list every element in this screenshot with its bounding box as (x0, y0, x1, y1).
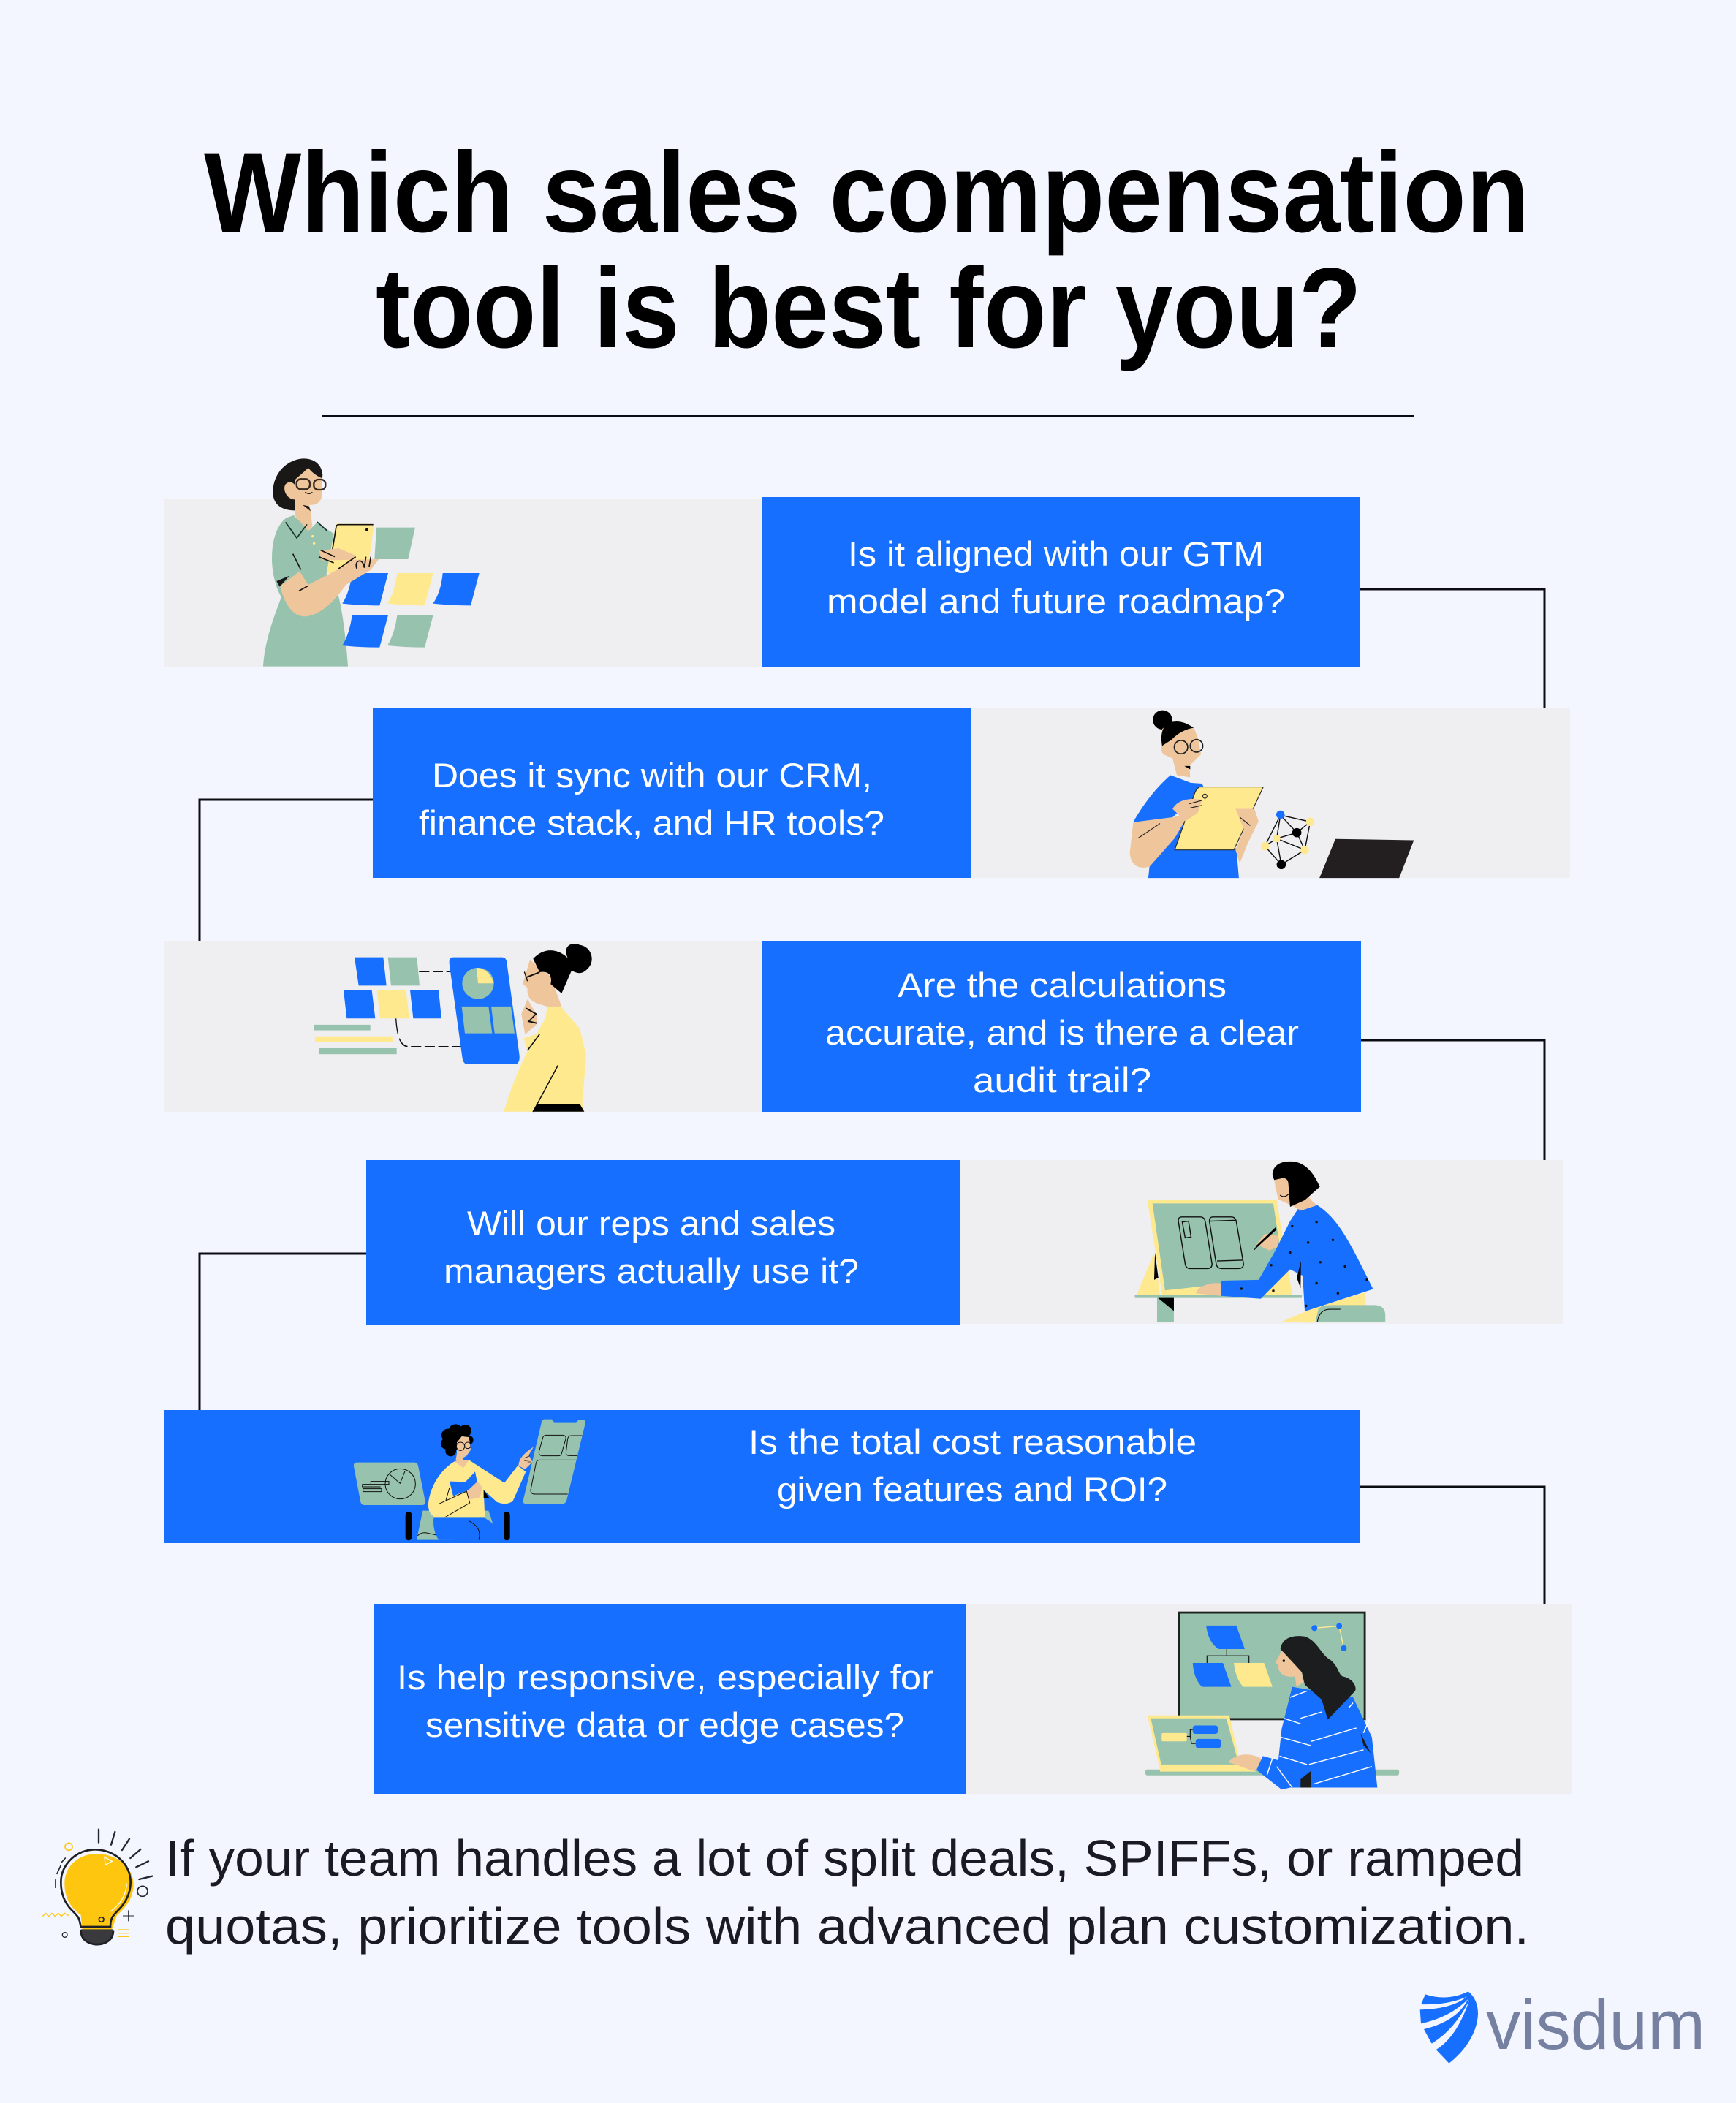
connector: row 5 to row 6 (1360, 1487, 1544, 1604)
connector: row 1 to row 2 (1360, 589, 1544, 709)
connector: row 3 to row 4 (1360, 1040, 1544, 1160)
callout: tip text (165, 1830, 1529, 1955)
question: support (397, 1658, 933, 1744)
question: total cost: Is the total cost reasonable (748, 1422, 1197, 1461)
question: total cost: given features and ROI? (777, 1470, 1167, 1509)
illustration: woman with tablet and sticky notes (263, 458, 480, 667)
question: total cost (748, 1422, 1197, 1509)
question: support: Is help responsive, especially for (397, 1658, 933, 1697)
title (204, 129, 1529, 372)
question: integrations: Does it sync with our CRM, (432, 756, 872, 795)
question: GTM alignment: model and future roadmap? (827, 582, 1285, 621)
title: Which sales compensation (204, 129, 1529, 257)
callout: tip text: quotas, prioritize tools with advanced plan customization. (165, 1898, 1529, 1955)
illustration: woman with phone mockup and cards (314, 944, 592, 1112)
connector: row 2 to row 3 (200, 800, 373, 941)
question: GTM alignment (827, 534, 1285, 621)
question: calculations: accurate, and is there a clear (825, 1013, 1299, 1052)
illustration: woman at laptop before board (1145, 1613, 1399, 1789)
question: adoption: Will our reps and sales (467, 1204, 835, 1243)
question: support: sensitive data or edge cases? (425, 1705, 904, 1744)
panel: row 6 support (374, 1604, 1572, 1794)
icon: shield (1420, 1991, 1478, 2064)
panel: row 3 calculations (164, 941, 1361, 1112)
callout: tip text: If your team handles a lot of split deals, SPIFFs, or ramped (165, 1830, 1524, 1887)
question: integrations: finance stack, and HR tools? (419, 803, 884, 842)
panel: row 1 GTM alignment (164, 458, 1360, 667)
panel: row 2 integrations (373, 708, 1570, 878)
panel: row 4 adoption (366, 1160, 1563, 1325)
question: adoption (444, 1204, 859, 1290)
question: GTM alignment: Is it aligned with our GTM (848, 534, 1264, 573)
question: adoption: managers actually use it? (444, 1251, 859, 1290)
logo: visdum: visdum (1486, 1986, 1705, 2064)
title: tool is best for you? (376, 245, 1362, 372)
illustration: person seated pointing at screens (354, 1420, 585, 1540)
question: calculations (825, 966, 1299, 1099)
connector: row 4 to row 5 (200, 1254, 366, 1410)
illustration: woman with yellow tablet, network and laptop (1130, 711, 1414, 878)
question: integrations (419, 756, 884, 842)
question: calculations: Are the calculations (898, 966, 1227, 1004)
icon: light bulb (42, 1830, 152, 1945)
question: calculations: audit trail? (973, 1061, 1151, 1099)
illustration: woman drawing at drafting table (1135, 1162, 1385, 1322)
panel: row 5 total cost (164, 1410, 1360, 1543)
